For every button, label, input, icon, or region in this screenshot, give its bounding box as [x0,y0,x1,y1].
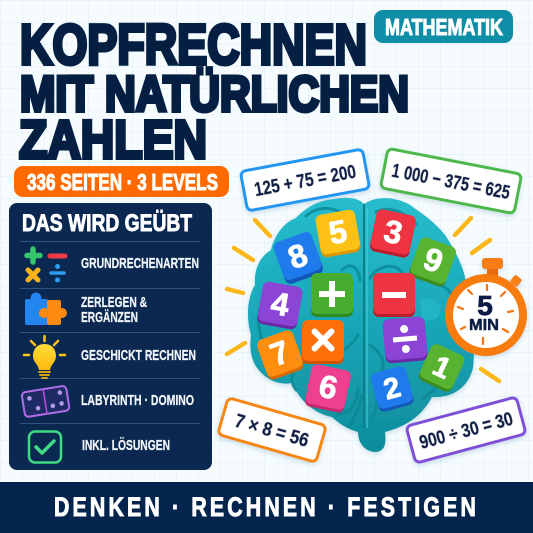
equation card: division: 900 ÷ 30 = 30 [417,409,515,454]
panel: Das wird geübt [9,203,212,470]
label: Zerlegen und Ergänzen: ZERLEGEN & [81,295,147,311]
icon: check box [29,432,61,462]
panel heading: DAS WIRD GEÜBT [22,210,192,237]
tile: 2: 2 [380,371,404,407]
title: MIT NATÜRLICHEN [20,66,409,122]
label: Zerlegen und Ergänzen [81,295,147,326]
label: Inklusive Lösungen: INKL. LÖSUNGEN [82,437,170,454]
equation card: addition: 125 + 75 = 200 [253,162,358,201]
icon: puzzle pieces [25,292,67,325]
tile: 9: 9 [419,240,448,280]
title: KOPFRECHNEN [20,13,367,77]
timer: 5 minutes [445,258,527,356]
brain illustration [248,198,474,452]
tile: 8 [272,230,325,285]
tile: 2 [370,365,415,413]
tile: 6: 6 [316,368,341,406]
tile: 3 [369,208,417,259]
tile: 1: 1 [428,350,456,386]
tile: plus [311,273,353,317]
footer banner [0,482,533,533]
badge: Mathematik [374,10,513,43]
tile: 8: 8 [283,236,312,276]
icon: arithmetic operators [27,249,65,282]
label: Zerlegen und Ergänzen: ERGÄNZEN [81,309,138,326]
tile: 6 [304,363,352,414]
badge: pages and levels [14,166,229,197]
tile: divide [382,316,428,364]
equation card: subtraction [380,148,522,214]
equation card: multiplication: 7 × 8 = 56 [232,411,311,452]
tile: 4: 4 [268,285,292,323]
label: Grundrechenarten: GRUNDRECHENARTEN [81,256,199,272]
timer number: 5 [477,290,493,321]
label: Geschickt rechnen: GESCHICKT RECHNEN [81,348,196,364]
badge: Mathematik: MATHEMATIK [385,14,503,40]
tile: 7: 7 [265,333,294,373]
tile: times [302,320,344,364]
tile: 9 [408,236,458,288]
equation card: multiplication [218,398,326,462]
icon: light bulb [24,336,65,378]
equation card: addition [240,149,370,211]
timer unit: MIN [469,317,499,334]
tile: 5: 5 [326,213,350,251]
tile: 1 [417,342,466,394]
title: ZAHLEN [19,110,207,170]
tile: 3: 3 [381,213,406,251]
equation card: division [406,397,526,463]
tile: minus [373,273,415,317]
icon: domino [21,386,70,417]
tile: 5 [315,209,362,258]
tile: 7 [255,329,305,381]
label: Labyrinth und Domino: LABYRINTH · DOMINO [81,393,194,409]
badge: pages and levels: 336 SEITEN · 3 LEVELS [27,169,218,195]
tile: 4 [256,281,303,330]
sparkle rays around brain [227,218,499,381]
title [19,13,409,170]
